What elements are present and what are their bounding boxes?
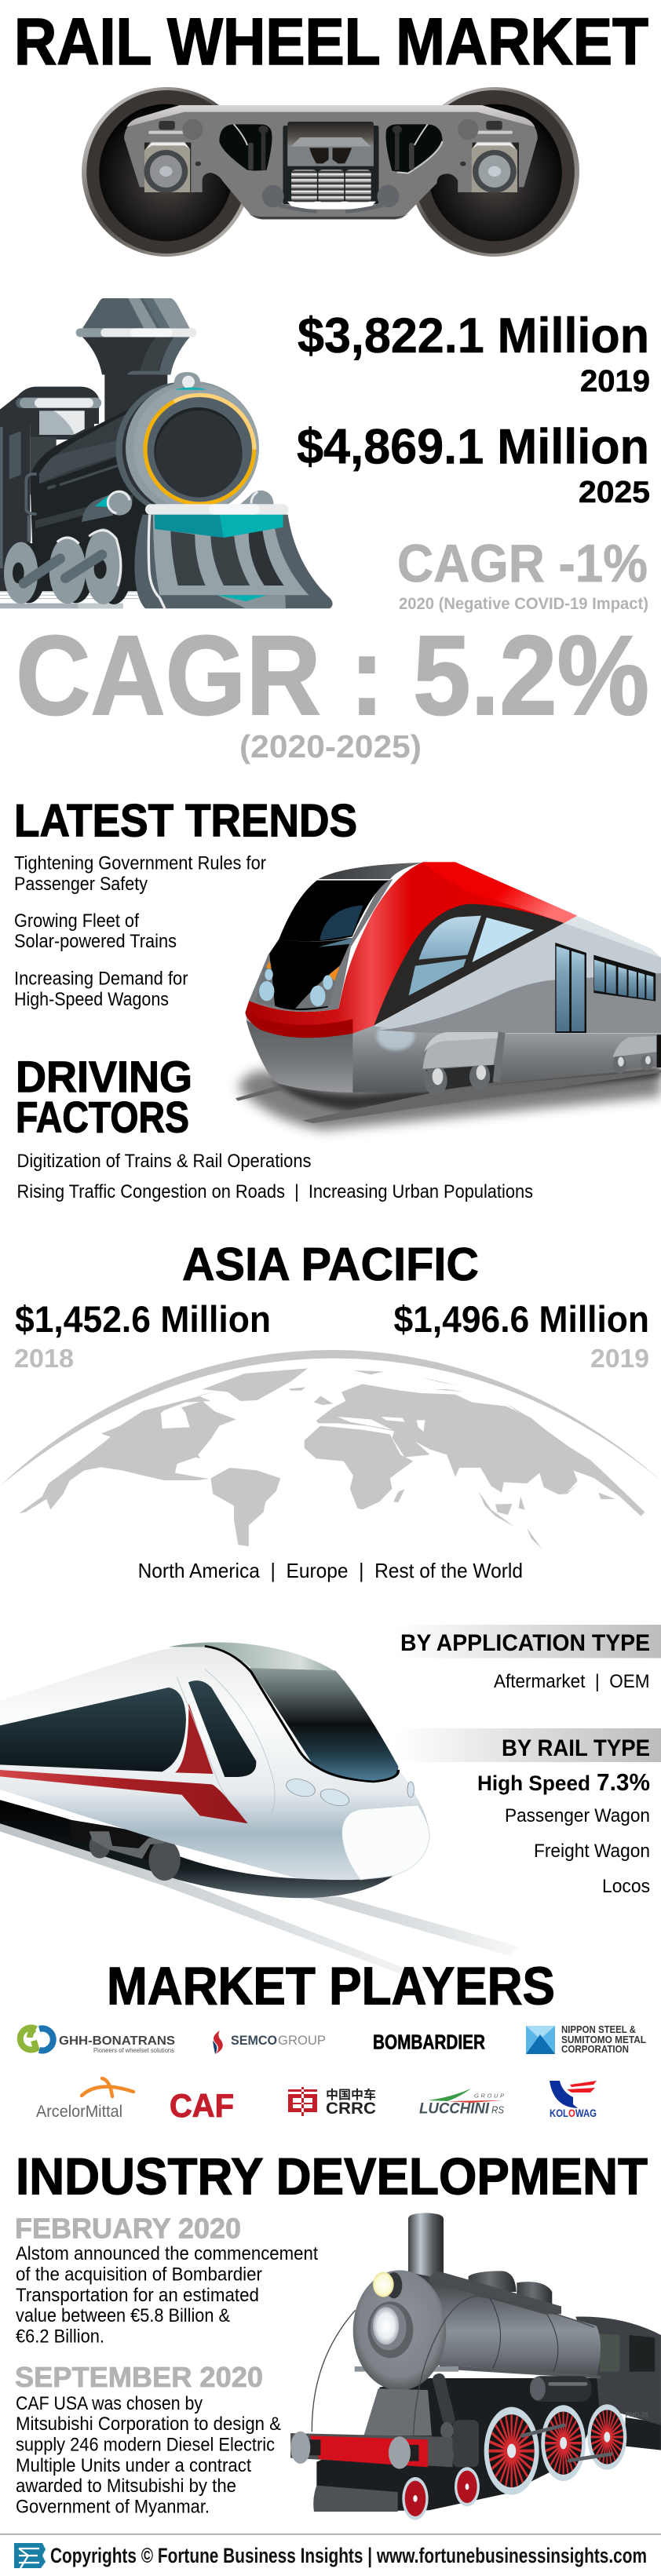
cab: [0, 387, 101, 591]
domes: [469, 2271, 552, 2305]
February text: €6.2 Billion.: [16, 2326, 104, 2348]
smoke box: [115, 381, 259, 517]
logo: GHH-Bonatrans: [20, 2028, 175, 2054]
Madagascar: [393, 1489, 405, 1502]
negative CAGR: CAGR -1%: [397, 534, 648, 593]
logo: GHH-Bonatrans: GHH-BONATRANS: [59, 2034, 175, 2048]
September text: [16, 2393, 281, 2518]
rail items: Freight Wagon: [534, 1841, 650, 1862]
Africa: [305, 1426, 413, 1509]
February text: [16, 2243, 318, 2348]
boiler: [400, 2271, 601, 2392]
logo: GHH-Bonatrans: Pioneers of wheelset solutions: [93, 2046, 174, 2054]
windscreen: [250, 1668, 398, 1782]
icon: red train: [236, 862, 661, 1130]
high speed share: [477, 1768, 650, 1796]
logo: Lucchini RS: RS: [491, 2104, 504, 2116]
logo: Bombardier: BOMBARDIER: [373, 2031, 485, 2054]
trends list: Passenger Safety: [14, 874, 148, 895]
Asia Pacific 2019 value: [394, 1298, 649, 1373]
rail items: Locos: [602, 1876, 650, 1897]
front skirt: [313, 2486, 398, 2512]
right wheel: [410, 87, 579, 257]
Asia Pacific 2019 value: 2019: [590, 1344, 649, 1373]
cab: [575, 2317, 661, 2425]
logo: Nippon Steel: CORPORATION: [561, 2044, 629, 2055]
cowcatcher: [134, 504, 333, 608]
chimney: [408, 2213, 444, 2276]
icon: black locomotive: [290, 2213, 661, 2520]
Arctic archipelago: [110, 1391, 219, 1432]
rail header band: [396, 1728, 661, 1762]
Asia Pacific 2019 value: $1,496.6 Million: [394, 1298, 649, 1340]
market value 2025: 2025: [579, 476, 650, 509]
trends list: Tightening Government Rules for: [14, 852, 266, 874]
application items: Aftermarket | OEM: [494, 1671, 650, 1692]
upper side: [374, 916, 661, 1034]
south east Asia islands: [478, 1485, 615, 1549]
September text: awarded to Mitsubishi by the: [16, 2476, 236, 2497]
icon: steam locomotive: [0, 298, 333, 608]
left wheel: [82, 87, 251, 257]
trends list: Growing Fleet of: [14, 910, 139, 932]
Eurasia: [316, 1384, 645, 1516]
frame windows: [219, 124, 443, 173]
trends list: High-Speed Wagons: [14, 989, 169, 1010]
logo: Kolowag: KOLOWAG: [550, 2107, 597, 2119]
logo: ArcelorMittal: [36, 2078, 133, 2121]
February text: of the acquisition of Bombardier: [16, 2264, 262, 2285]
high speed share: High Speed: [477, 1771, 590, 1795]
Asia Pacific 2018 value: [14, 1298, 271, 1373]
smokebox: [353, 2270, 446, 2391]
February text: Transportation for an estimated: [16, 2285, 259, 2306]
logo: CRRC: [288, 2087, 376, 2118]
panel: by rail type: [396, 1728, 661, 1897]
red triangle: [175, 1703, 213, 1774]
panel: by application type: [396, 1625, 661, 1692]
heading: Asia Pacific: ASIA PACIFIC: [182, 1239, 479, 1290]
market value 2025: [297, 419, 650, 509]
buffer beam: [290, 2432, 453, 2469]
logo: CRRC: 中国中车: [326, 2087, 376, 2102]
left axle box: [144, 119, 203, 193]
logo: Semco Group: SEMCO: [231, 2033, 277, 2048]
September text: Multiple Units under a contract: [16, 2455, 251, 2476]
side windows: [593, 955, 656, 1002]
underbody: [0, 1800, 393, 1898]
heading: driving factors: DRIVING: [16, 1052, 192, 1101]
logo: CAF: CAF: [170, 2087, 234, 2124]
world map: [0, 1350, 661, 1549]
icon: white high speed train: [0, 1642, 519, 1982]
logo: CRRC: CRRC: [326, 2100, 376, 2118]
wheel arches and wheels: [423, 1032, 661, 1096]
high speed share: 7.3%: [597, 1768, 650, 1796]
September text: Mitsubishi Corporation to design &: [16, 2414, 281, 2435]
red stripe: [0, 1770, 248, 1823]
side window: [0, 1688, 186, 1771]
cab: PMO-35: [626, 2411, 648, 2418]
British Isles and Iceland: [289, 1387, 333, 1405]
rail items: [505, 1805, 650, 1897]
pilot wheels: [402, 2467, 480, 2520]
September text: CAF USA was chosen by: [16, 2393, 203, 2414]
application header band: [396, 1625, 661, 1658]
market value 2019: $3,822.1 Million: [298, 308, 649, 363]
Asia Pacific 2018 value: 2018: [14, 1344, 74, 1373]
driving factors list: Digitization of Trains & Rail Operations: [17, 1151, 311, 1172]
September text: supply 246 modern Diesel Electric: [16, 2435, 275, 2456]
train body: [0, 1646, 429, 1880]
frame: [316, 2378, 601, 2512]
driving wheels: [484, 2404, 626, 2495]
northern islands: [353, 1370, 531, 1418]
door outline: [177, 1669, 275, 1823]
South America: [210, 1468, 280, 1546]
application heading: BY APPLICATION TYPE: [400, 1630, 650, 1656]
nose panel: [342, 1805, 429, 1880]
door: [555, 943, 586, 1033]
bogie frame: [124, 105, 538, 219]
chimney: [76, 298, 196, 421]
coupling rods: [522, 2425, 611, 2461]
regions list: North America | Europe | Rest of the World: [138, 1559, 523, 1582]
driving factors list: [17, 1151, 533, 1202]
trends list: Increasing Demand for: [14, 969, 188, 989]
atmosphere arc: [0, 1350, 661, 1486]
cab face: [249, 863, 423, 1012]
September heading: SEPTEMBER 2020: [15, 2361, 263, 2393]
red shell: [245, 862, 577, 1038]
September text: Government of Myanmar.: [16, 2497, 210, 2518]
icon: wheel bogie: [82, 87, 579, 257]
roof: [169, 1642, 334, 1670]
logo: Lucchini RS: GROUP: [474, 2093, 504, 2100]
tender: [626, 2417, 661, 2450]
air tank: [530, 2376, 591, 2402]
logo: Lucchini RS: [419, 2089, 504, 2118]
heading: latest trends: LATEST TRENDS: [14, 796, 357, 846]
headlights: [283, 1775, 414, 1809]
logo: Nippon Steel: SUMITOMO METAL: [561, 2034, 646, 2045]
logo: ArcelorMittal: ArcelorMittal: [36, 2103, 122, 2121]
lower body: [245, 1013, 661, 1093]
boiler: [26, 390, 183, 591]
springs and bolster: [262, 122, 399, 211]
main CAGR: (2020-2025): [239, 728, 422, 764]
right axle box: [458, 119, 517, 193]
footer logo: [14, 2543, 46, 2568]
Greenland: [203, 1368, 308, 1401]
headlights: [256, 961, 340, 1009]
logo: Nippon Steel: [526, 2024, 646, 2055]
wheels and rods: [0, 528, 139, 608]
contact shadow: [271, 1067, 661, 1111]
trends list: [14, 852, 266, 1010]
slope plate: [363, 2388, 432, 2436]
logo: Nippon Steel: NIPPON STEEL &: [561, 2024, 636, 2035]
driving factors list: Rising Traffic Congestion on Roads | Increasing Urban Populations: [17, 1181, 533, 1202]
rail items: Passenger Wagon: [505, 1805, 650, 1826]
heading: driving factors: FACTORS: [16, 1093, 189, 1142]
heading: market players: MARKET PLAYERS: [107, 1957, 555, 2016]
bogie: [69, 1819, 181, 1881]
development: February 2020: [15, 2212, 318, 2348]
rail heading: BY RAIL TYPE: [502, 1735, 650, 1761]
rails: [236, 1070, 661, 1123]
headlamp: [373, 2272, 402, 2298]
logo: Lucchini RS: LUCCHINI: [419, 2101, 490, 2118]
trends list: Solar-powered Trains: [14, 931, 177, 952]
negative CAGR: 2020 (Negative COVID-19 Impact): [399, 595, 648, 613]
market value 2019: [298, 308, 650, 399]
February text: value between €5.8 Billion &: [16, 2305, 230, 2326]
logo: Semco Group: [213, 2031, 326, 2054]
heading: driving factors: [16, 1052, 192, 1142]
bell mount: [174, 372, 206, 390]
February text: Alstom announced the commencement: [16, 2243, 318, 2264]
tracks: [0, 1823, 519, 1982]
development: September 2020: [15, 2361, 281, 2518]
market value 2025: $4,869.1 Million: [297, 419, 649, 474]
North America: [19, 1401, 236, 1513]
door window: [188, 1680, 256, 1777]
logo: Kolowag: [550, 2081, 597, 2119]
market value 2019: 2019: [580, 364, 650, 399]
Asia Pacific 2018 value: $1,452.6 Million: [15, 1298, 271, 1340]
train shadow: [238, 1065, 661, 1130]
wires: [312, 2296, 594, 2436]
piston rods: [431, 2372, 479, 2467]
logo: Semco Group: GROUP: [278, 2033, 326, 2048]
right dome: [239, 491, 274, 505]
window surround: [374, 904, 564, 1026]
February heading: FEBRUARY 2020: [15, 2212, 241, 2245]
inland seas: [338, 1417, 425, 1432]
